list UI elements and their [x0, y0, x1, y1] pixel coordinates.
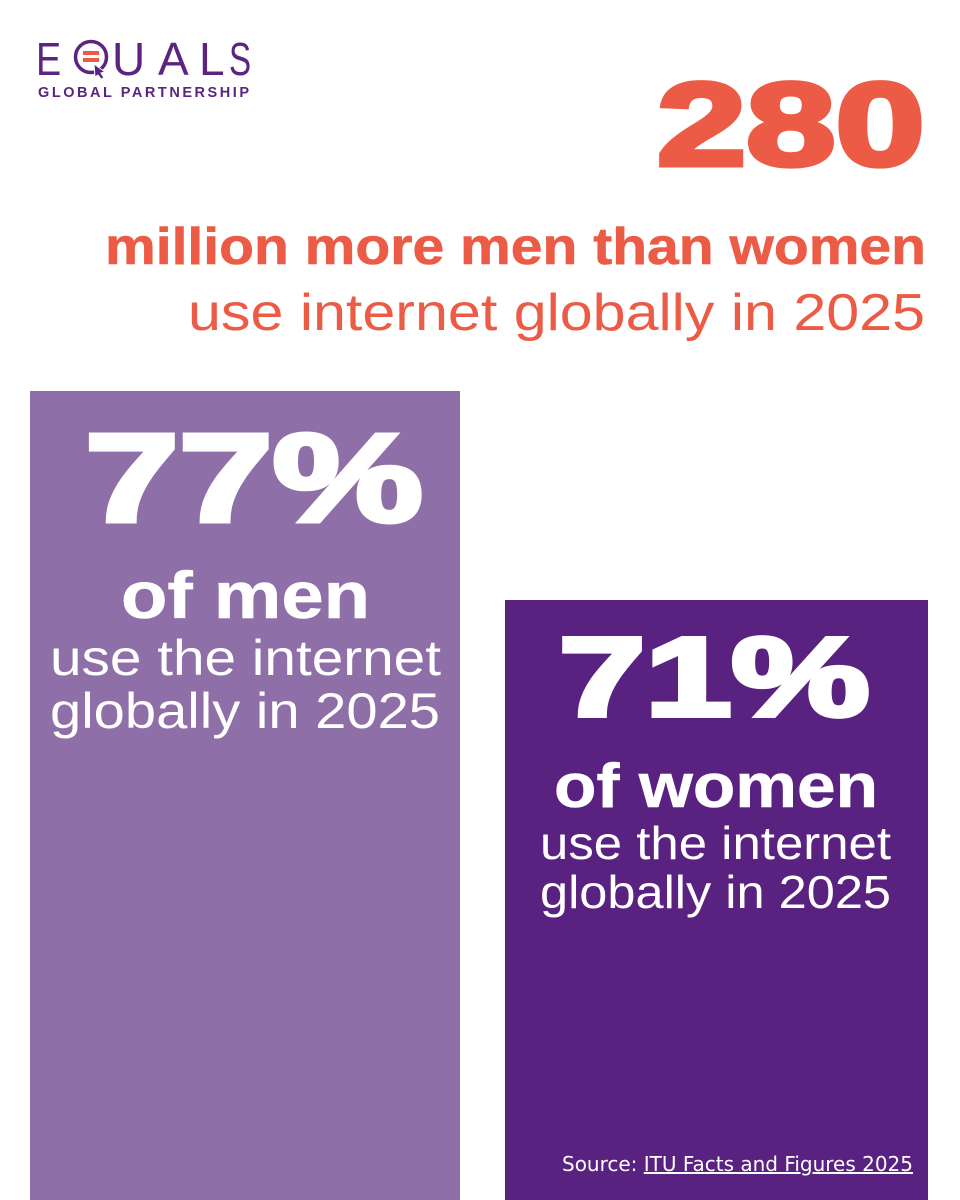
logo: Equals Global Partnership	[36, 33, 251, 101]
women description	[540, 817, 891, 918]
men percentage: 77%	[85, 409, 423, 548]
subheadline: use internet globally in 2025	[188, 284, 925, 342]
logo wordmark: E	[36, 33, 61, 85]
men label: of men	[121, 558, 370, 632]
women percentage: 71%	[559, 615, 869, 740]
men description	[50, 630, 441, 739]
headline: million more men than women: million more men than women	[105, 218, 926, 276]
men bar background	[30, 391, 460, 1200]
women label: of women	[554, 752, 878, 821]
logo wordmark: L	[199, 33, 225, 85]
women bar background	[505, 600, 928, 1200]
headline number: 280: 280	[657, 58, 925, 190]
logo tagline: GLOBAL PARTNERSHIP	[38, 85, 249, 101]
men description: use the internet	[50, 630, 441, 686]
logo wordmark: A	[158, 33, 189, 85]
logo wordmark: U	[112, 33, 145, 85]
panel: men bar	[30, 391, 460, 1200]
source note: Source: ITU Facts and Figures 2025	[562, 1152, 913, 1176]
logo wordmark	[36, 33, 251, 85]
women description: globally in 2025	[540, 866, 891, 918]
logo icon: Q with equals sign and cursor	[76, 42, 106, 79]
logo wordmark: S	[229, 35, 251, 85]
women description: use the internet	[540, 817, 891, 869]
men description: globally in 2025	[50, 683, 440, 739]
panel: women bar	[505, 600, 928, 1200]
